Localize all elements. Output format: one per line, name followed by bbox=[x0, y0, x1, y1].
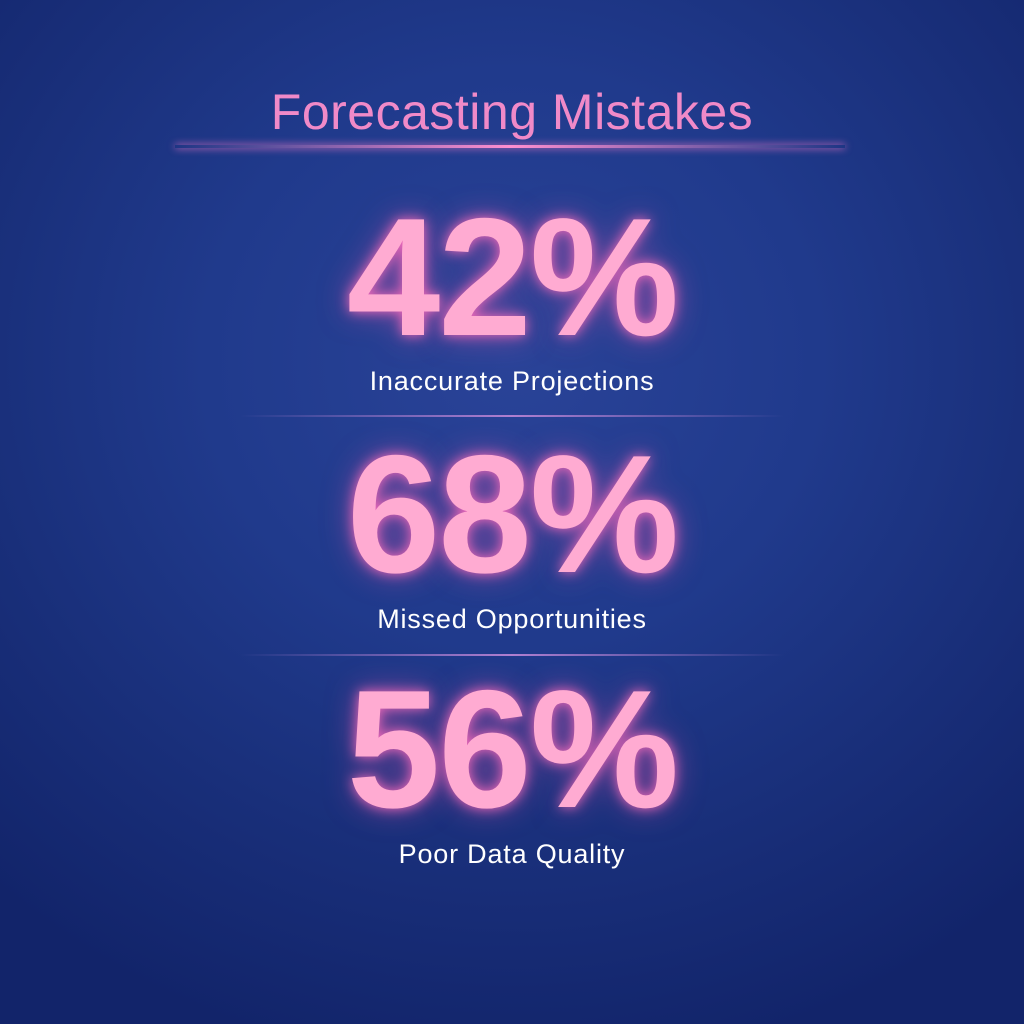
stat: 42%: 42% bbox=[347, 183, 677, 371]
label: Inaccurate Projections: Inaccurate Projections bbox=[370, 366, 654, 396]
stat: 56%: 56% bbox=[347, 655, 677, 843]
label: Missed Opportunities: Missed Opportunities bbox=[377, 604, 647, 634]
stat: 68%: 68% bbox=[347, 420, 677, 608]
title underline bbox=[175, 145, 845, 148]
title: Forecasting Mistakes bbox=[271, 84, 753, 140]
label: Poor Data Quality: Poor Data Quality bbox=[399, 839, 625, 869]
